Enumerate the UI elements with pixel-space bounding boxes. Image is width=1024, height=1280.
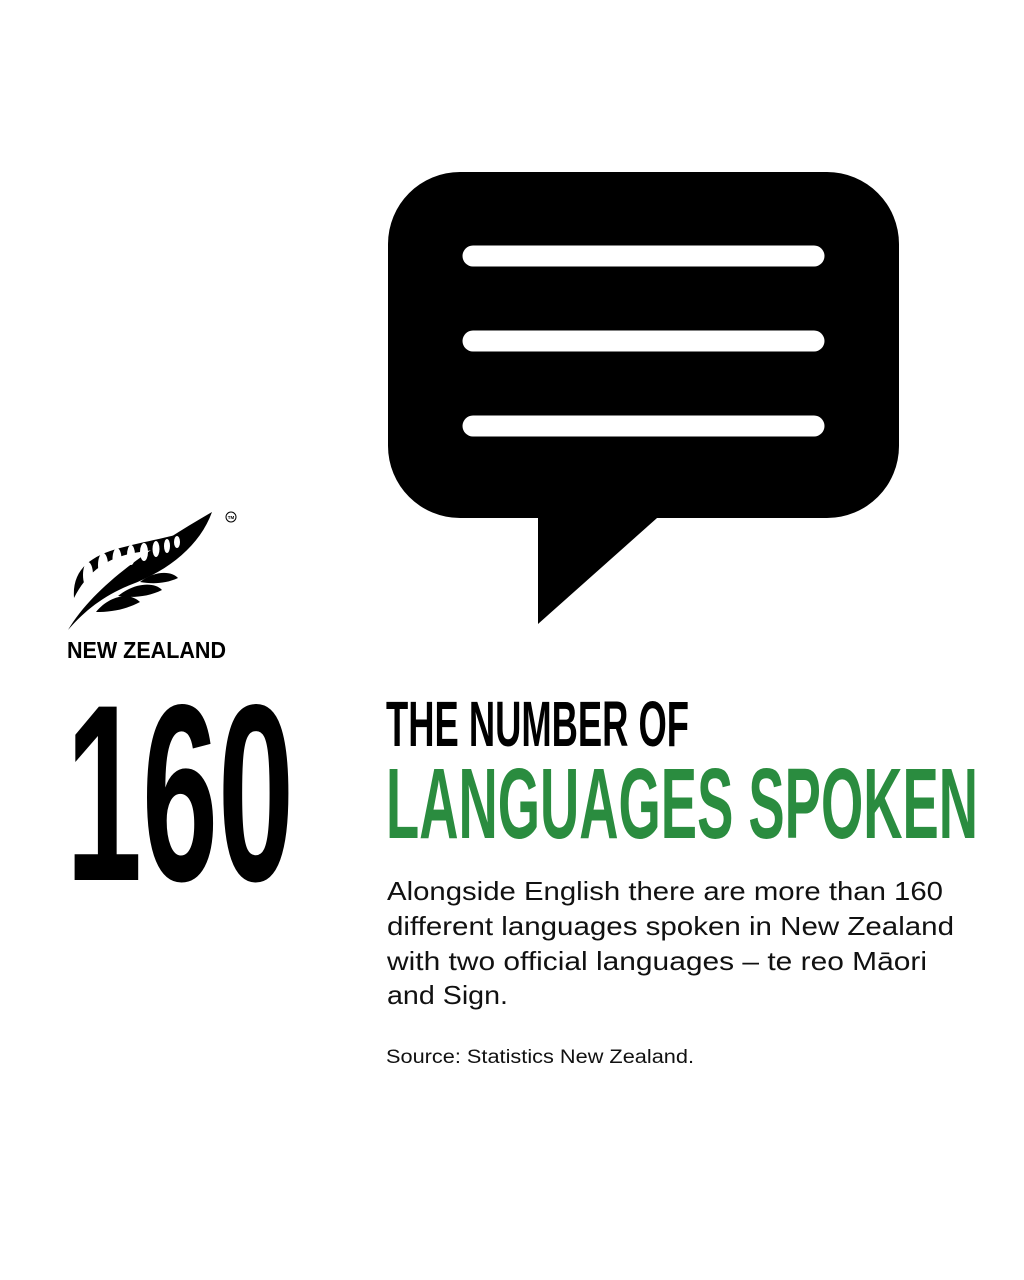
body text: with two official languages – te reo Māori bbox=[386, 946, 927, 976]
icon: speech bubble bbox=[388, 172, 899, 624]
logo text: NEW ZEALAND bbox=[67, 637, 226, 663]
logo: New Zealand fern: TM bbox=[228, 515, 234, 520]
logo: New Zealand fern bbox=[68, 512, 236, 630]
source: Source: Statistics New Zealand. bbox=[386, 1047, 694, 1068]
heading line 1: THE NUMBER OF bbox=[386, 688, 689, 760]
body text: different languages spoken in New Zealand bbox=[387, 911, 954, 941]
body text bbox=[386, 876, 954, 1010]
body text: and Sign. bbox=[387, 980, 508, 1010]
big number: 160 bbox=[66, 653, 294, 934]
body text: Alongside English there are more than 160 bbox=[387, 876, 943, 906]
